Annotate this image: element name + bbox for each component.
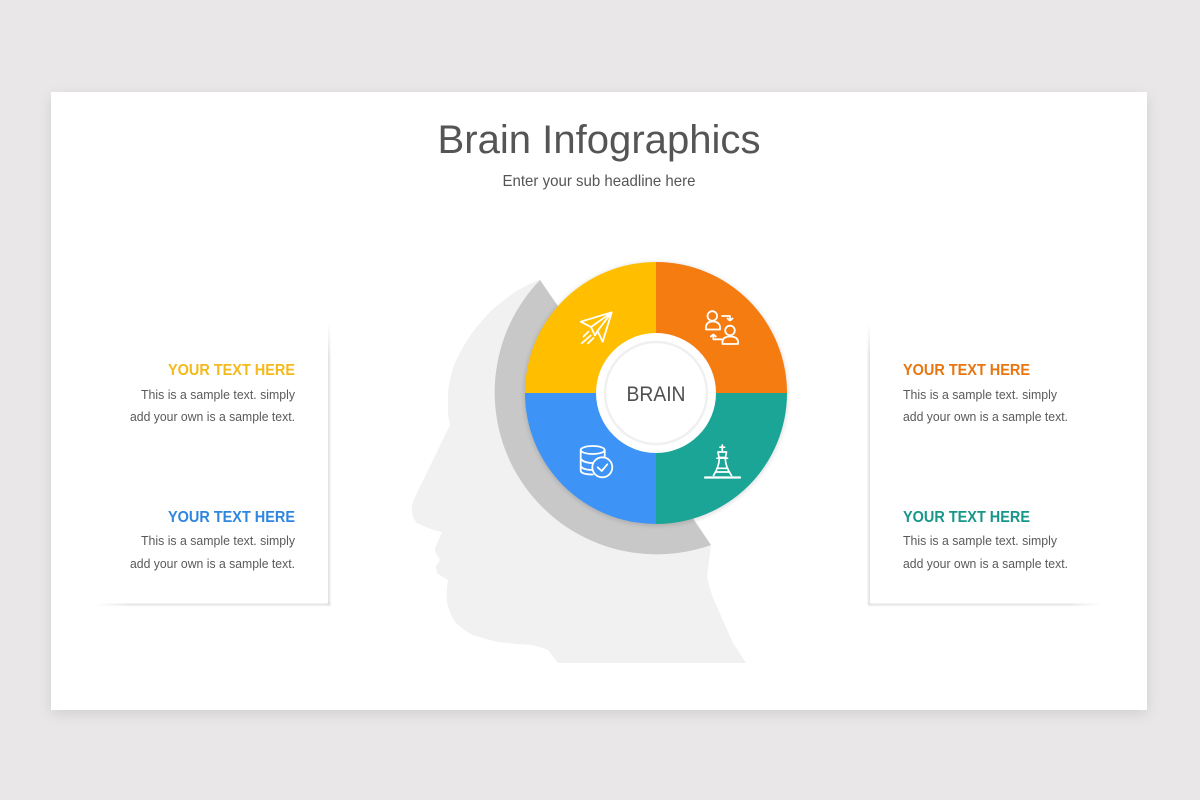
right item: orange: YOUR TEXT HERE <box>903 362 1030 379</box>
center circle <box>596 333 716 453</box>
icon: chess king <box>705 445 740 478</box>
left item: yellow: add your own is a sample text. <box>130 410 295 424</box>
slide panel <box>51 92 1147 714</box>
left item: blue: add your own is a sample text. <box>130 557 295 571</box>
left item: blue <box>130 509 296 571</box>
right item: teal: This is a sample text. simply <box>903 534 1058 548</box>
left item: yellow <box>130 362 296 424</box>
donut wheel <box>524 262 788 526</box>
icon: people exchange <box>706 311 738 344</box>
left item: yellow: YOUR TEXT HERE <box>168 362 295 379</box>
left item: yellow: This is a sample text. simply <box>141 388 296 402</box>
left item: blue: This is a sample text. simply <box>141 534 296 548</box>
left item: blue: YOUR TEXT HERE <box>168 509 295 526</box>
right item: teal: YOUR TEXT HERE <box>903 509 1030 526</box>
icon: database check <box>581 446 612 477</box>
right item: orange <box>903 362 1068 424</box>
segment: orange <box>656 262 787 393</box>
gray arc behind the wheel <box>495 280 711 554</box>
head silhouette <box>412 280 746 663</box>
icon: paper plane <box>581 312 612 343</box>
right item: orange: add your own is a sample text. <box>903 410 1068 424</box>
right item: orange: This is a sample text. simply <box>903 388 1058 402</box>
right item: teal <box>903 509 1068 571</box>
right item: teal: add your own is a sample text. <box>903 557 1068 571</box>
segment: teal <box>656 393 787 524</box>
subtitle: Enter your sub headline here <box>502 173 696 190</box>
title: Brain Infographics <box>438 118 760 162</box>
panel: left card <box>95 322 330 605</box>
segment: yellow <box>525 262 656 393</box>
segment: blue <box>525 393 656 524</box>
panel: right card <box>868 322 1102 605</box>
center label: BRAIN <box>626 383 686 406</box>
